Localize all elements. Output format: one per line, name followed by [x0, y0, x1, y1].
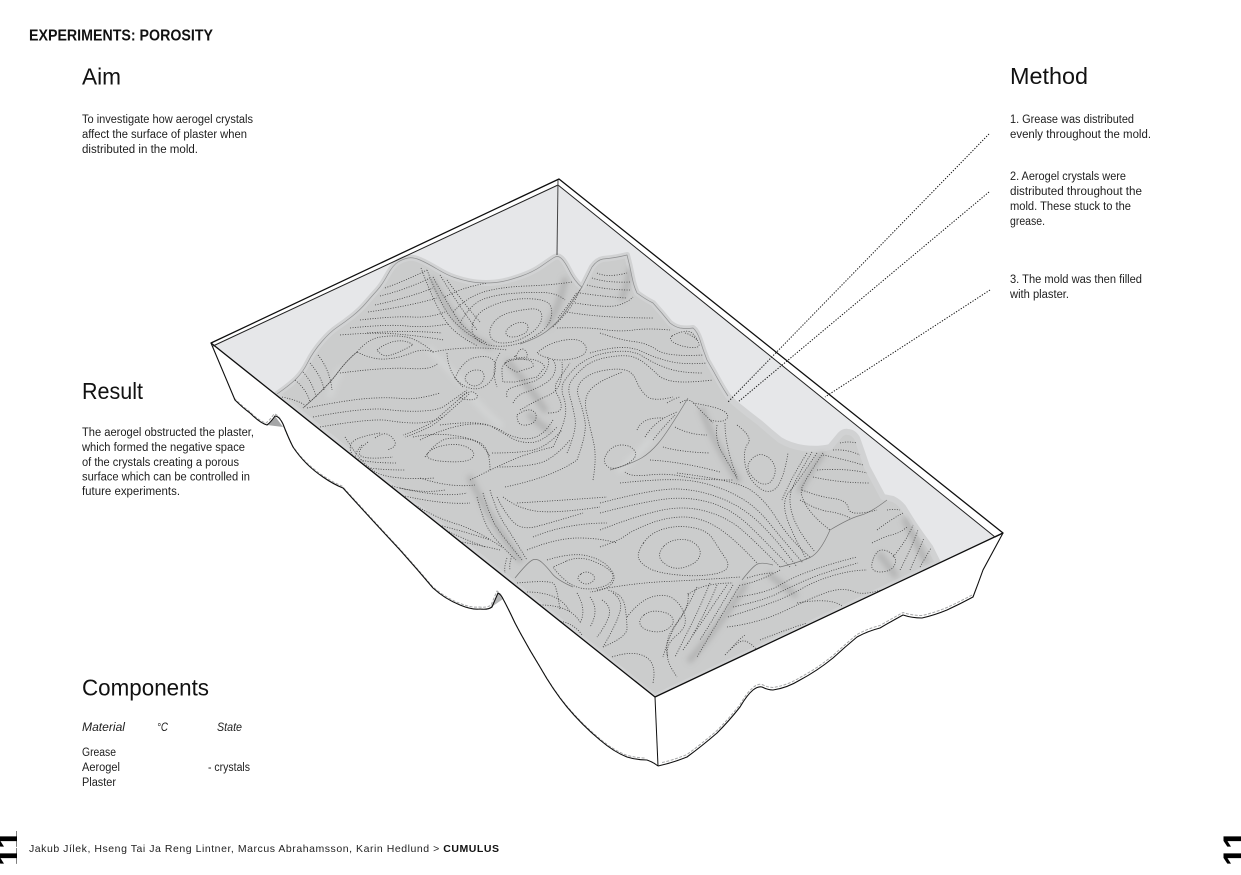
text block: method step 1: 1. Grease was distributed — [1010, 114, 1134, 126]
arrow: method step 1 leader — [728, 134, 989, 402]
text block: aim description: affect the surface of plaster when — [82, 129, 247, 141]
title: EXPERIMENTS: POROSITY — [29, 28, 214, 44]
text block: result description: The aerogel obstructed the plaster, — [82, 427, 254, 439]
text block: method step 3 — [1009, 274, 1142, 301]
table rows: Plaster — [82, 777, 116, 789]
illustration: plaster block in mold — [211, 179, 1003, 766]
text block: method step 2: 2. Aerogel crystals were — [1010, 171, 1126, 183]
mold rim — [211, 179, 1003, 766]
right side face — [655, 533, 1003, 766]
arrow: method step 2 leader — [738, 192, 989, 402]
panel: components — [82, 674, 250, 789]
heading: aim: Aim — [82, 64, 121, 90]
heading: components: Components — [82, 674, 209, 700]
text block: method step 2: distributed throughout the — [1010, 186, 1142, 198]
text block: method step 3: with plaster. — [1009, 289, 1069, 301]
table header: Material — [82, 722, 125, 734]
text block: method step 1: evenly throughout the mold. — [1010, 129, 1151, 141]
text block: result description: of the crystals creating a porous — [82, 457, 239, 469]
text block: method step 3: 3. The mold was then filled — [1010, 274, 1142, 286]
arrow: method step 3 leader — [825, 290, 990, 397]
text block: method step 2 — [1010, 171, 1142, 228]
table rows: Grease — [82, 747, 116, 759]
table rows — [82, 747, 250, 789]
left side face — [211, 343, 658, 766]
table rows: Aerogel — [82, 762, 120, 774]
panel: aim — [82, 64, 253, 156]
contour lines — [282, 268, 931, 683]
plaster surface — [277, 255, 938, 697]
table header: State — [217, 722, 242, 734]
table header: °C — [157, 722, 169, 734]
panel: result — [81, 378, 254, 498]
text block: method step 2: grease. — [1010, 216, 1045, 228]
text block: result description: surface which can be controlled in — [82, 472, 250, 484]
text block: result description: future experiments. — [82, 486, 180, 498]
text block: method step 1 — [1010, 114, 1151, 141]
mold inner wall — [213, 185, 995, 697]
table header — [82, 722, 242, 734]
heading: method: Method — [1010, 63, 1088, 89]
footer credit: Jakub Jílek, Hseng Tai Ja Reng Lintner, Marcus Abrahamsson, Karin Hedlund > CUMULUS — [29, 843, 499, 855]
surface shading — [429, 267, 928, 663]
inner ridge edges — [303, 287, 887, 587]
panel: method — [1009, 63, 1151, 301]
heading: result: Result — [82, 378, 144, 404]
table rows: - crystals — [208, 762, 250, 774]
text block: method step 2: mold. These stuck to the — [1010, 201, 1131, 213]
text block: aim description: distributed in the mold. — [82, 144, 198, 156]
text block: aim description — [82, 114, 253, 156]
text block: result description — [81, 427, 254, 498]
text block: result description: which formed the negative space — [81, 442, 245, 454]
text block: aim description: To investigate how aerogel crystals — [82, 114, 253, 126]
